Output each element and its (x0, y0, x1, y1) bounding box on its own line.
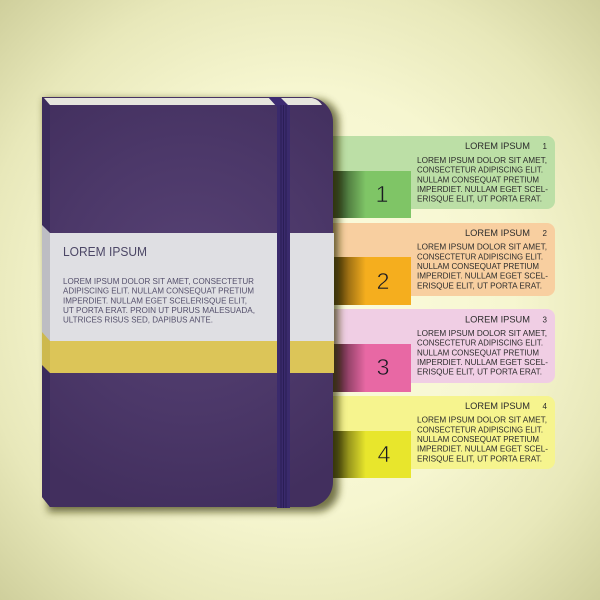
panel 1 body: NULLAM CONSEQUAT PRETIUM (417, 174, 539, 184)
panel 1 body: CONSECTETUR ADIPISCING ELIT. (417, 165, 543, 175)
panel 2 body (417, 242, 548, 290)
notebook spine (42, 97, 50, 507)
tab 1: 1 (375, 181, 389, 207)
panel 1: green (333, 136, 555, 218)
panel 3 heading: LOREM IPSUM (465, 314, 530, 324)
tab 4: 4 (377, 441, 391, 467)
panel 4: yellow: 4 (543, 402, 548, 411)
tab 2 (333, 257, 411, 305)
label body text: UT PORTA ERAT. PROIN UT PURUS MALESUADA, (63, 305, 255, 315)
notebook cover (42, 97, 333, 507)
label body text: IMPERDIET. NULLAM EGET SCELERISQUE ELIT, (63, 295, 247, 305)
label body text: ADIPISCING ELIT. NULLAM CONSEQUAT PRETIUM (63, 286, 254, 296)
panel 2: orange (333, 223, 555, 305)
panel 1: green: 1 (543, 142, 548, 151)
panel 4 body: CONSECTETUR ADIPISCING ELIT. (417, 424, 543, 434)
tab 3 (333, 344, 411, 392)
panel 3: pink: 3 (543, 316, 548, 324)
panel 4 body: IMPERDIET. NULLAM EGET SCEL- (417, 444, 548, 454)
panel 2: orange: 2 (543, 229, 548, 238)
panel 4 body (417, 415, 548, 463)
panel 2 body: NULLAM CONSEQUAT PRETIUM (417, 261, 539, 271)
panel 3 body: IMPERDIET. NULLAM EGET SCEL- (417, 357, 548, 367)
label body text: LOREM IPSUM DOLOR SIT AMET, CONSECTETUR (63, 276, 254, 286)
panel 2 body: ERISQUE ELIT, UT PORTA ERAT. (417, 280, 542, 290)
label heading: LOREM IPSUM (63, 245, 147, 259)
tab 4 (333, 431, 411, 478)
tab 2: 2 (376, 268, 390, 294)
panel 3 body: NULLAM CONSEQUAT PRETIUM (417, 347, 539, 357)
panel 1 body: IMPERDIET. NULLAM EGET SCEL- (417, 184, 548, 194)
panel 2 body: CONSECTETUR ADIPISCING ELIT. (417, 251, 543, 261)
panel 2 body: LOREM IPSUM DOLOR SIT AMET, (417, 242, 547, 252)
panel 3 body (417, 328, 548, 377)
panel 4 heading: LOREM IPSUM (465, 401, 530, 411)
panel 4 body: ERISQUE ELIT, UT PORTA ERAT. (417, 453, 542, 463)
elastic strap (268, 97, 290, 508)
tab 3: 3 (376, 354, 390, 380)
panel 4: yellow (333, 396, 555, 478)
label body text: ULTRICES RISUS SED, DAPIBUS ANTE. (63, 315, 213, 325)
panel 4 body: NULLAM CONSEQUAT PRETIUM (417, 434, 539, 444)
band: white label (42, 225, 334, 341)
panel 2 body: IMPERDIET. NULLAM EGET SCEL- (417, 271, 548, 281)
notebook (42, 97, 339, 512)
panel 3 body: CONSECTETUR ADIPISCING ELIT. (417, 338, 543, 348)
panel 2 heading: LOREM IPSUM (465, 228, 530, 238)
panel 3 body: LOREM IPSUM DOLOR SIT AMET, (417, 328, 547, 338)
panel 1 body (417, 155, 548, 204)
tab 1 (333, 171, 411, 218)
panel 1 body: ERISQUE ELIT, UT PORTA ERAT. (417, 194, 542, 204)
panel 4 body: LOREM IPSUM DOLOR SIT AMET, (417, 415, 547, 425)
notebook pages (44, 98, 322, 105)
panel 3 body: ERISQUE ELIT, UT PORTA ERAT. (417, 367, 542, 377)
panel 3: pink (333, 309, 555, 392)
panel 1 heading: LOREM IPSUM (465, 141, 530, 151)
panel 1 body: LOREM IPSUM DOLOR SIT AMET, (417, 155, 547, 165)
band: yellow stripe (42, 332, 334, 373)
label body text (63, 276, 255, 325)
notebook shadow (44, 99, 339, 512)
